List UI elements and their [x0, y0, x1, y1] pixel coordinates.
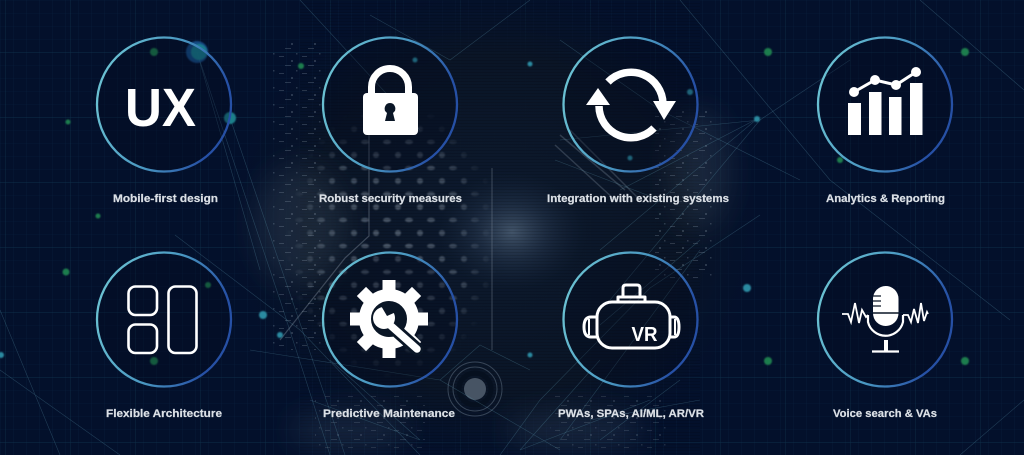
label: Analytics & Reporting [826, 193, 945, 205]
item: Mobile-first design [97, 38, 231, 205]
item: Robust security measures [319, 38, 462, 205]
icon: gear with wrench [350, 280, 428, 358]
item: Analytics & Reporting [818, 38, 952, 205]
chip circle [448, 362, 502, 416]
label: Robust security measures [319, 193, 462, 205]
icon: layout blocks [128, 286, 196, 353]
ring [97, 38, 231, 172]
label: Flexible Architecture [106, 408, 222, 420]
label: Predictive Maintenance [323, 408, 455, 420]
icon: VR headset [584, 285, 679, 348]
label: Integration with existing systems [547, 193, 729, 205]
label: Voice search & VAs [833, 408, 937, 420]
ring [323, 252, 457, 386]
icon: microphone with sound waves [842, 286, 928, 352]
ring [818, 252, 952, 386]
ring [97, 252, 231, 386]
item: PWAs, SPAs, AI/ML, AR/VR [558, 252, 704, 420]
item: Flexible Architecture [97, 252, 231, 420]
item: Voice search & VAs [818, 252, 952, 420]
icon: padlock [363, 69, 418, 135]
glowing nodes [0, 41, 969, 365]
ring [818, 38, 952, 172]
item: Predictive Maintenance [323, 252, 457, 420]
icon: sync arrows [586, 72, 676, 138]
label: PWAs, SPAs, AI/ML, AR/VR [558, 408, 704, 420]
ring [323, 38, 457, 172]
icon: bar chart with trend line [848, 67, 922, 135]
icon: VR headset: VR [632, 324, 658, 346]
item: Integration with existing systems [547, 38, 729, 205]
label: Mobile-first design [113, 193, 218, 205]
ring [564, 252, 698, 386]
ring [564, 38, 698, 172]
icon: UX: UX [125, 78, 196, 138]
